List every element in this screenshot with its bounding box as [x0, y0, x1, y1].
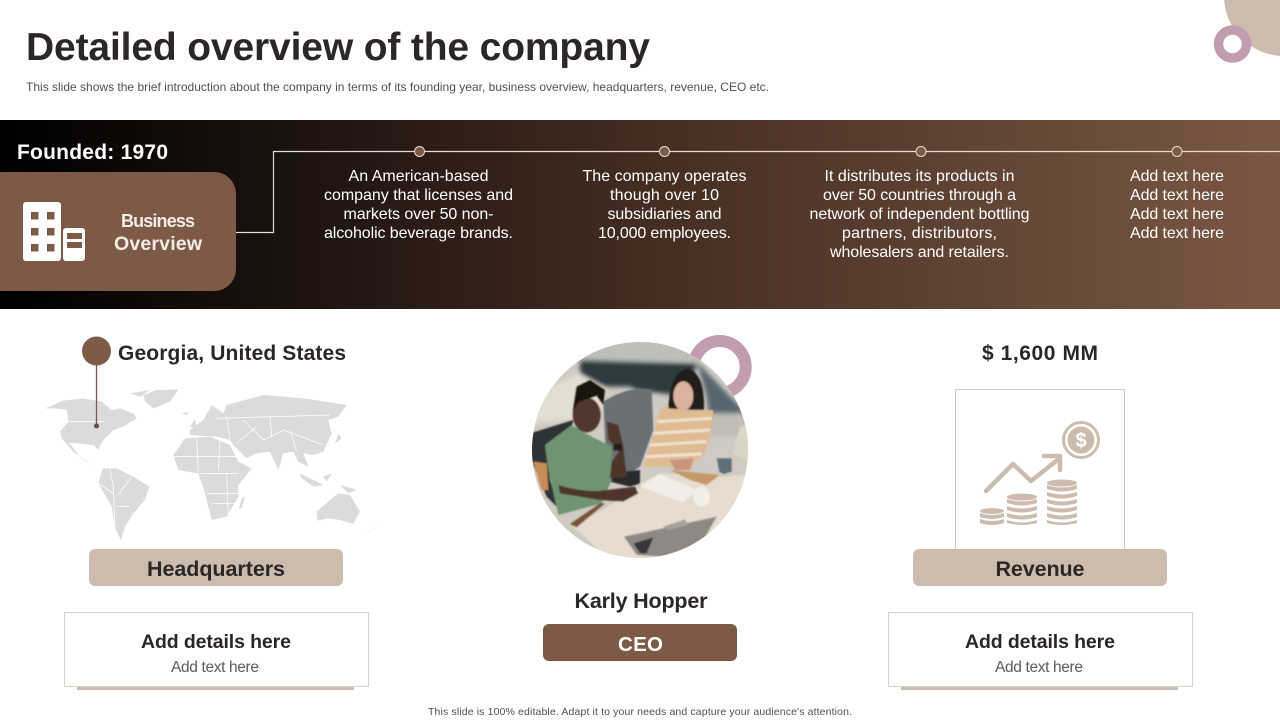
decorative corner ring	[1218, 30, 1246, 58]
revenue pill: Revenue	[996, 557, 1085, 581]
details box: revenue: Add details here	[965, 631, 1115, 653]
decorative photo ring	[694, 341, 746, 393]
icon: growth chart with coins: $	[1075, 430, 1087, 452]
man	[545, 425, 612, 515]
text block: placeholder: Add text here	[1130, 206, 1224, 223]
revenue icon box	[956, 390, 1124, 550]
subtitle: This slide shows the brief introduction about the company in terms of its founding year, business overview, headquarters, revenue, CEO etc.	[26, 80, 769, 94]
panel: business overview band	[0, 120, 1280, 309]
glasses	[693, 487, 710, 507]
world map	[45, 389, 380, 540]
mug	[717, 458, 732, 474]
text block: placeholder: Add text here	[1130, 168, 1224, 185]
footer note: This slide is 100% editable. Adapt it to your needs and capture your audience's attention.	[428, 706, 852, 718]
text block: placeholder: Add text here	[1130, 225, 1224, 242]
revenue amount: $ 1,600 MM	[982, 342, 1098, 365]
timeline nodes	[414, 146, 1182, 156]
text block: brands: alcoholic beverage brands.	[324, 225, 513, 242]
decorative corner circle	[1224, 0, 1280, 56]
revenue pill	[913, 549, 1167, 586]
details box: headquarters	[64, 612, 368, 690]
business overview card	[0, 172, 236, 291]
text block: brands: An American-based	[348, 168, 488, 185]
card label: Overview	[114, 233, 203, 255]
headquarters pill	[89, 549, 343, 586]
details box: revenue: Add text here	[995, 659, 1083, 676]
icon: growth chart with coins	[980, 422, 1098, 525]
text block: distribution: partners, distributors,	[842, 225, 997, 242]
CEO name: Karly Hopper	[574, 589, 708, 613]
panel: CEO	[530, 340, 753, 661]
text block: subsidiaries: subsidiaries and	[608, 206, 722, 223]
text block: brands: markets over 50 non-	[344, 206, 494, 223]
headquarters pill: Headquarters	[147, 557, 285, 581]
text block: distribution: over 50 countries through a	[823, 187, 1016, 204]
title: Detailed overview of the company	[26, 26, 650, 69]
CEO pill	[543, 624, 737, 661]
woman	[643, 405, 713, 467]
details box: revenue	[888, 612, 1192, 690]
text block: distribution: network of independent bottling	[810, 206, 1030, 223]
text block: subsidiaries: though over 10	[610, 187, 719, 204]
panel: headquarters	[45, 336, 380, 690]
icon: buildings	[23, 202, 85, 261]
founded label: Founded: 1970	[17, 141, 168, 164]
details box: headquarters: Add details here	[141, 631, 291, 653]
text block: subsidiaries: 10,000 employees.	[598, 225, 731, 242]
text block: distribution: It distributes its products in	[824, 168, 1014, 185]
CEO pill: CEO	[618, 633, 663, 656]
location label: Georgia, United States	[118, 342, 346, 365]
text block: placeholder: Add text here	[1130, 187, 1224, 204]
timeline connector	[236, 152, 1280, 232]
chairs	[603, 389, 653, 473]
laptop	[624, 517, 717, 557]
text block: brands: company that licenses and	[324, 187, 513, 204]
card label: Business	[121, 211, 195, 231]
photo: team at a table	[530, 340, 753, 570]
details box: headquarters: Add text here	[171, 659, 259, 676]
location pin	[82, 336, 111, 428]
table	[573, 473, 753, 570]
text block: distribution: wholesalers and retailers.	[829, 244, 1009, 261]
text block: subsidiaries: The company operates	[582, 168, 746, 185]
panel: revenue	[888, 342, 1192, 690]
